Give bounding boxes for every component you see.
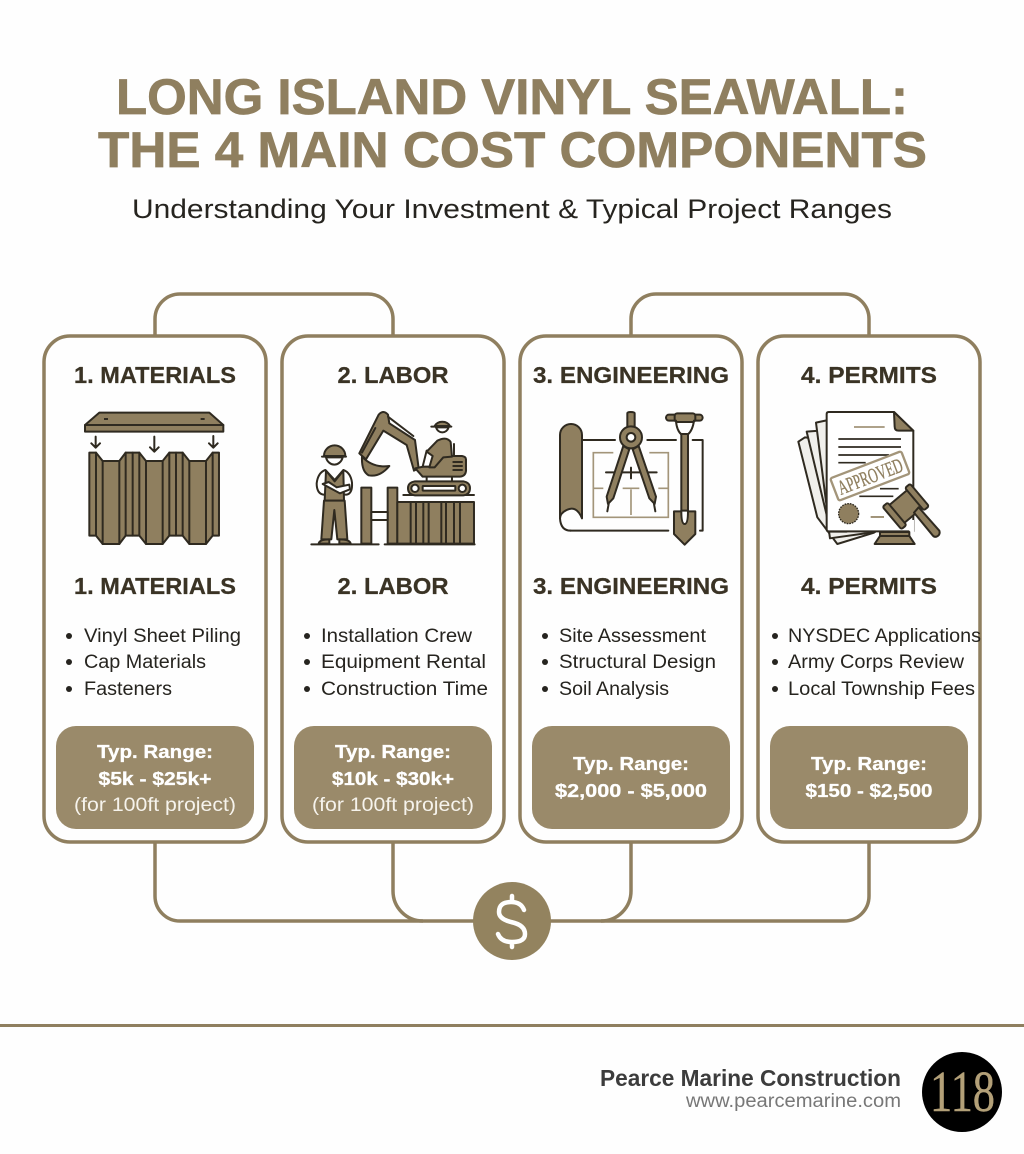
list: permits: Local Township Fees bbox=[788, 679, 975, 700]
cost range: engineering: Typ. Range: bbox=[573, 753, 689, 774]
heading: permits: 4. PERMITS bbox=[801, 362, 937, 388]
logo badge bbox=[922, 1052, 1002, 1132]
panel: materials bbox=[44, 336, 266, 842]
cost range: materials: (for 100ft project) bbox=[74, 795, 236, 816]
cost range: engineering: $2,000 - $5,000 bbox=[555, 780, 707, 801]
list: engineering: Soil Analysis bbox=[559, 679, 669, 700]
connector lines bbox=[155, 294, 869, 921]
footer brand text bbox=[600, 1065, 901, 1112]
list: labor: Construction Time bbox=[321, 679, 488, 700]
cost range: materials bbox=[56, 726, 254, 829]
title: LONG ISLAND VINYL SEAWALL: bbox=[116, 69, 908, 125]
list: permits: NYSDEC Applications bbox=[788, 626, 981, 647]
heading: materials repeated: 1. MATERIALS bbox=[74, 573, 236, 599]
heading: labor repeated: 2. LABOR bbox=[338, 573, 449, 599]
panel: permits bbox=[758, 336, 981, 842]
footer divider bbox=[0, 1024, 1024, 1027]
title: THE 4 MAIN COST COMPONENTS bbox=[98, 122, 927, 178]
heading: labor: 2. LABOR bbox=[338, 362, 449, 388]
footer brand text: www.pearcemarine.com bbox=[685, 1091, 901, 1112]
list: labor: Equipment Rental bbox=[321, 652, 486, 673]
list: engineering: Structural Design bbox=[559, 652, 716, 673]
cost range: labor bbox=[294, 726, 492, 829]
subtitle: Understanding Your Investment & Typical Project Ranges bbox=[132, 194, 892, 224]
list: materials: Fasteners bbox=[84, 679, 172, 700]
list: permits bbox=[772, 626, 981, 700]
cost range: materials: $5k - $25k+ bbox=[98, 768, 212, 789]
cost range: materials: Typ. Range: bbox=[97, 741, 213, 762]
heading: materials: 1. MATERIALS bbox=[74, 362, 236, 388]
title bbox=[98, 69, 927, 178]
cost range: permits bbox=[770, 726, 968, 829]
icon: construction crew and excavator bbox=[311, 412, 475, 544]
cost range: permits: $150 - $2,500 bbox=[806, 780, 932, 801]
panel: engineering bbox=[520, 336, 742, 842]
heading: engineering: 3. ENGINEERING bbox=[533, 362, 729, 388]
cost range: labor: $10k - $30k+ bbox=[332, 768, 454, 789]
list: labor bbox=[304, 626, 488, 700]
cost range: engineering bbox=[532, 726, 730, 829]
heading: engineering repeated: 3. ENGINEERING bbox=[533, 573, 729, 599]
list: permits: Army Corps Review bbox=[788, 652, 964, 673]
icon: dollar circle bbox=[473, 882, 551, 960]
list: materials: Vinyl Sheet Piling bbox=[84, 626, 241, 647]
list: materials: Cap Materials bbox=[84, 652, 206, 673]
footer brand text: Pearce Marine Construction bbox=[600, 1065, 901, 1091]
cost range: permits: Typ. Range: bbox=[811, 753, 927, 774]
list: engineering bbox=[542, 626, 716, 700]
panel: labor bbox=[282, 336, 504, 842]
cost range: labor: Typ. Range: bbox=[335, 741, 451, 762]
logo badge: 118 bbox=[930, 1059, 995, 1124]
icon: approved permit and gavel: APPROVED bbox=[835, 455, 906, 500]
cost range: labor: (for 100ft project) bbox=[312, 795, 474, 816]
heading: permits repeated: 4. PERMITS bbox=[801, 573, 937, 599]
list: engineering: Site Assessment bbox=[559, 626, 707, 647]
icon: vinyl sheet piling bbox=[85, 413, 223, 544]
list: labor: Installation Crew bbox=[321, 626, 472, 647]
list: materials bbox=[66, 626, 241, 700]
icon: approved permit and gavel bbox=[798, 412, 940, 544]
icon: blueprint, compass and shovel bbox=[560, 412, 703, 545]
